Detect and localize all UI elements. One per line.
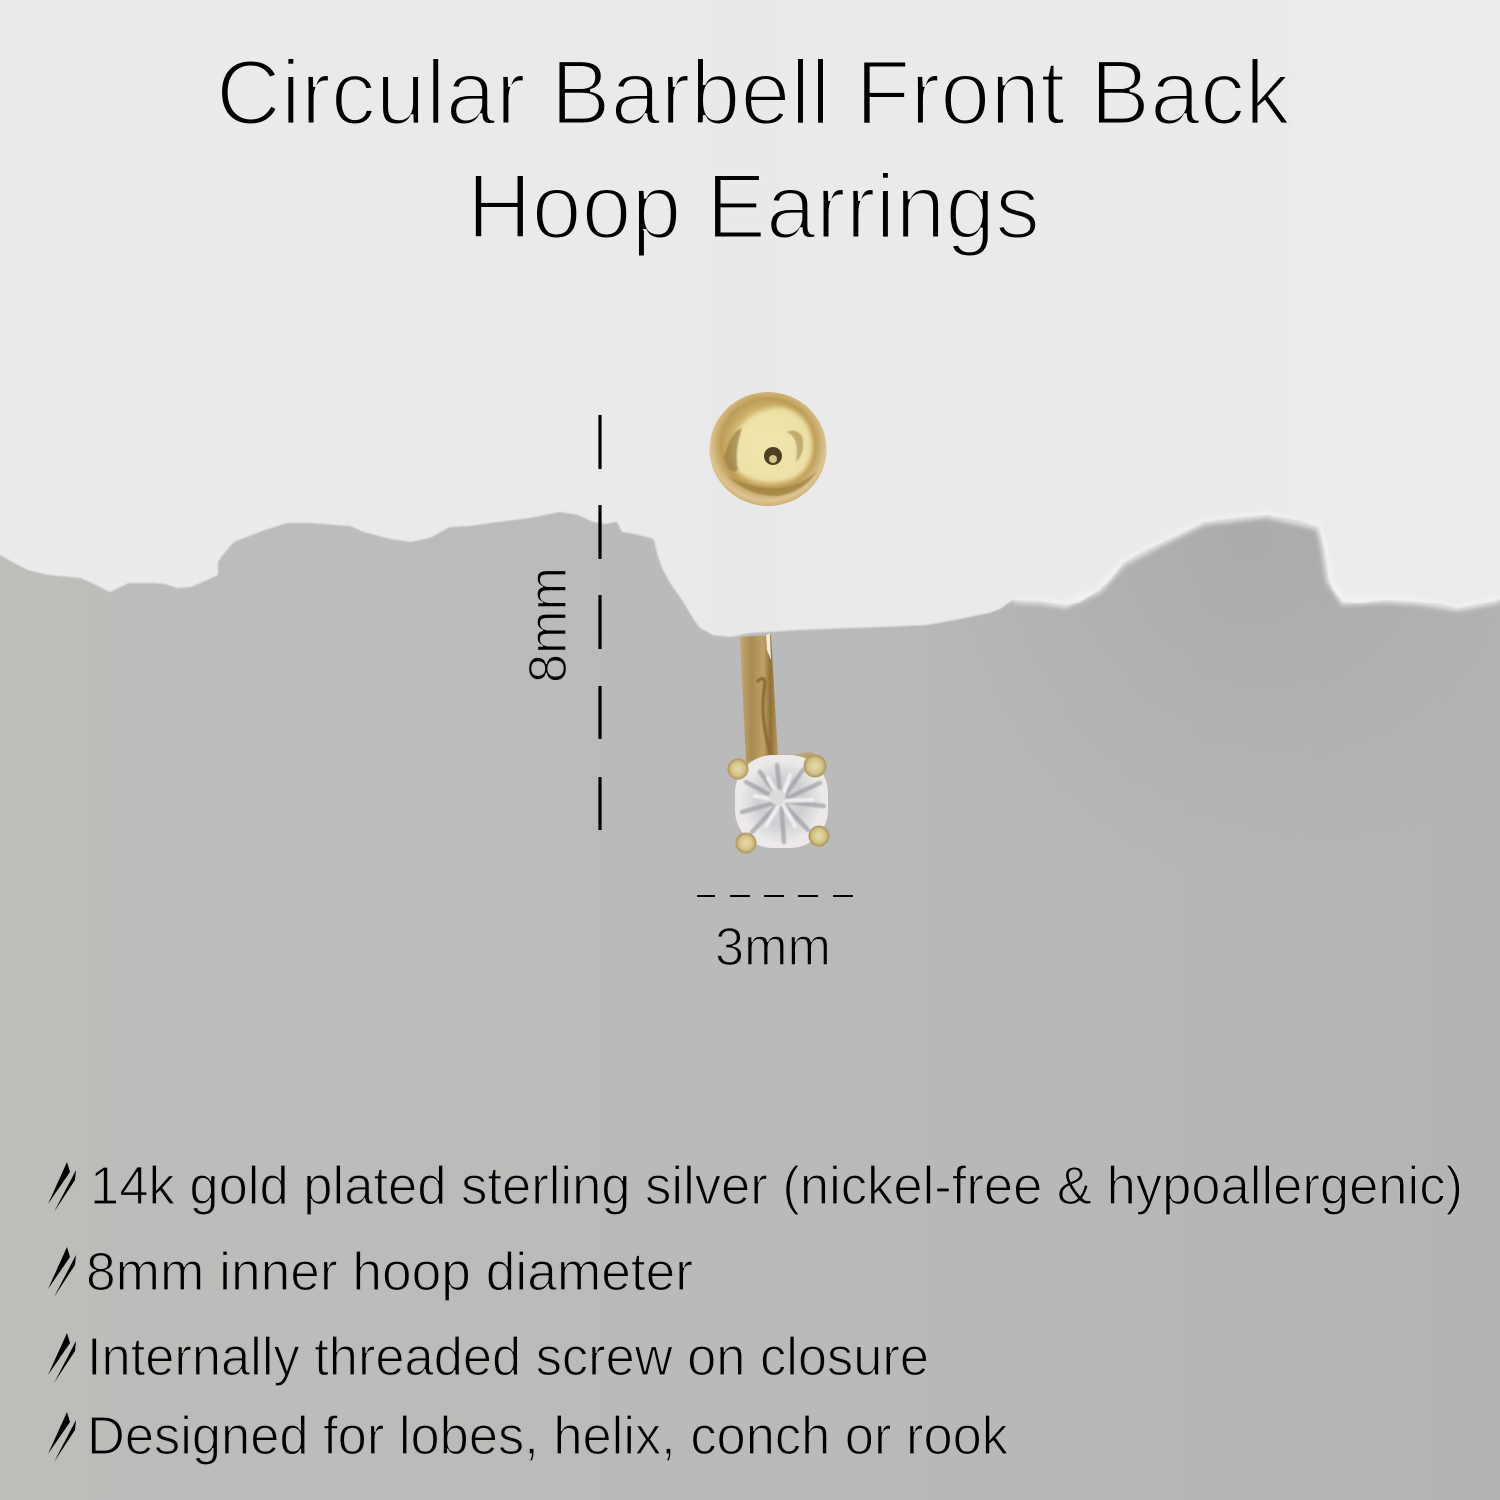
feature 4: Designed for lobes, helix, conch or rook (87, 1406, 1009, 1466)
feature 1: 14k gold plated sterling silver (nickel-free & hypoallergenic) (90, 1156, 1463, 1216)
feature 3: Internally threaded screw on closure (87, 1327, 929, 1387)
dashed measure line: 3mm width (697, 895, 853, 897)
title (216, 42, 1291, 258)
icon: prong-set clear gemstone (728, 752, 830, 854)
icon: gold barbell shaft (740, 634, 778, 762)
torn paper sheet (0, 0, 1500, 637)
title: Circular Barbell Front Back (216, 42, 1291, 144)
feature 2: 8mm inner hoop diameter (86, 1242, 693, 1302)
label: 8mm: 8mm (518, 567, 578, 683)
icon: gold ball back of earring (710, 392, 826, 506)
label: 3mm: 3mm (715, 917, 831, 977)
feature list (48, 1156, 1463, 1466)
title: Hoop Earrings (467, 156, 1040, 258)
dashed measure line: 8mm height (598, 415, 602, 830)
